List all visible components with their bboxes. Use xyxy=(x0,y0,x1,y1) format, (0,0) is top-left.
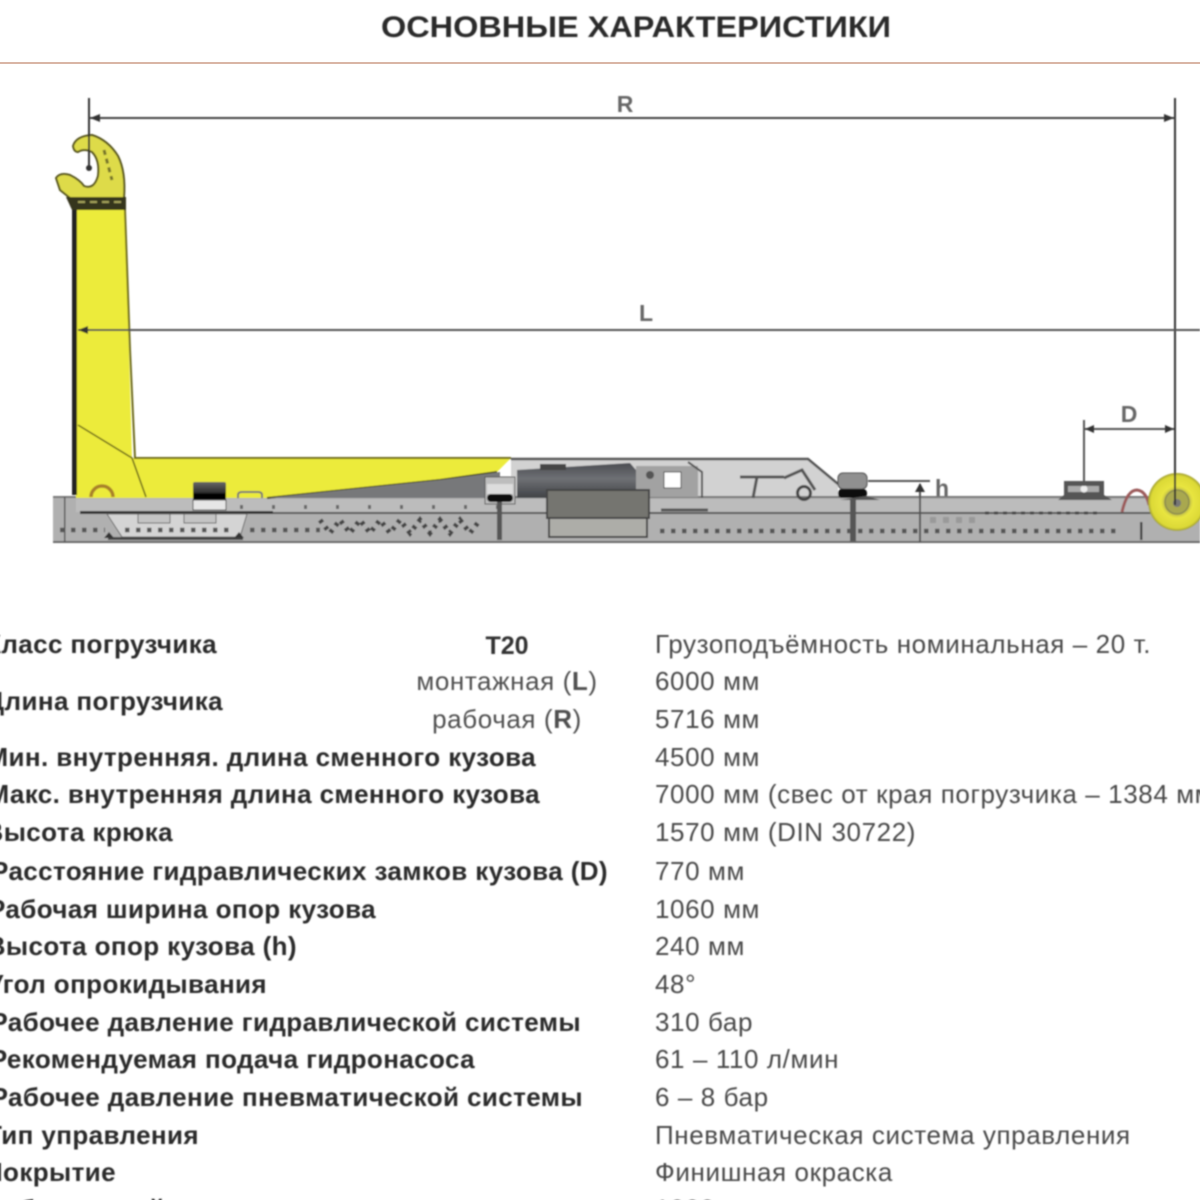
row: coating xyxy=(0,1157,893,1187)
row: pneumatic pressure: 6 – 8 бар xyxy=(655,1082,769,1112)
row: pneumatic pressure: Рабочее давление пневматической системы xyxy=(0,1082,583,1112)
title: ОСНОВНЫЕ ХАРАКТЕРИСТИКИ xyxy=(381,11,891,44)
central block xyxy=(547,490,649,537)
dimension R xyxy=(89,91,1175,505)
dimension h xyxy=(868,475,949,542)
row: lock distance: 770 мм xyxy=(655,856,745,886)
dimension L: L xyxy=(639,300,653,326)
rivet rows xyxy=(60,530,1118,531)
dimension h: h xyxy=(935,475,949,501)
row: max body length: Макс. внутренняя длина сменного кузова xyxy=(0,779,540,809)
row: tipping angle xyxy=(0,969,696,999)
row: pump flow xyxy=(0,1044,839,1074)
row: hook height xyxy=(0,817,916,847)
row: support width: 1060 мм xyxy=(655,894,760,924)
yellow arm xyxy=(72,208,511,498)
row: pump flow: Рекомендуемая подача гидронасоса xyxy=(0,1044,475,1074)
dimension L xyxy=(78,300,1200,334)
row: control type: Пневматическая система управления xyxy=(655,1120,1131,1150)
hook xyxy=(56,135,126,210)
row: support height xyxy=(0,931,745,961)
row: loader class: Грузоподъёмность номинальная – 20 т. xyxy=(655,629,1151,659)
row: loader length: 5716 мм xyxy=(655,704,760,734)
row: hook height: 1570 мм (DIN 30722) xyxy=(655,817,916,847)
row: loader length: рабочая (R) xyxy=(432,704,582,734)
body supports xyxy=(193,473,1112,541)
row: tipping angle: 48° xyxy=(655,969,696,999)
row: max body length xyxy=(0,779,1200,809)
row: loader length: монтажная (L) xyxy=(416,666,598,696)
chassis frame xyxy=(53,496,1200,543)
row: support height: 240 мм xyxy=(655,931,745,961)
row: pump flow: 61 – 110 л/мин xyxy=(655,1044,839,1074)
row: clipped last line xyxy=(0,1194,745,1200)
hydraulic cylinder and sub-frame xyxy=(267,459,838,500)
row: control type xyxy=(0,1120,1131,1150)
row: coating: Финишная окраска xyxy=(655,1157,893,1187)
row: min body length: 4500 мм xyxy=(655,742,760,772)
row: lock distance: Расстояние гидравлических замков кузова (D) xyxy=(0,856,608,886)
row: hydraulic pressure: Рабочее давление гидравлической системы xyxy=(0,1007,581,1037)
row: loader class xyxy=(0,629,1151,660)
row: loader length: 6000 мм xyxy=(655,666,760,696)
title rule xyxy=(0,62,1200,64)
hooklift technical drawing xyxy=(53,91,1200,543)
row: min body length: Мин. внутренняя. длина сменного кузова xyxy=(0,742,536,772)
specifications table xyxy=(0,629,1200,1200)
dimension D: D xyxy=(1121,401,1137,427)
row: loader class: Т20 xyxy=(485,632,529,660)
row: support width xyxy=(0,894,760,924)
row: loader length xyxy=(0,666,760,734)
dimension D xyxy=(1084,401,1174,486)
row: hydraulic pressure: 310 бар xyxy=(655,1007,753,1037)
dimension R: R xyxy=(617,91,634,117)
rear roller xyxy=(1122,473,1200,531)
